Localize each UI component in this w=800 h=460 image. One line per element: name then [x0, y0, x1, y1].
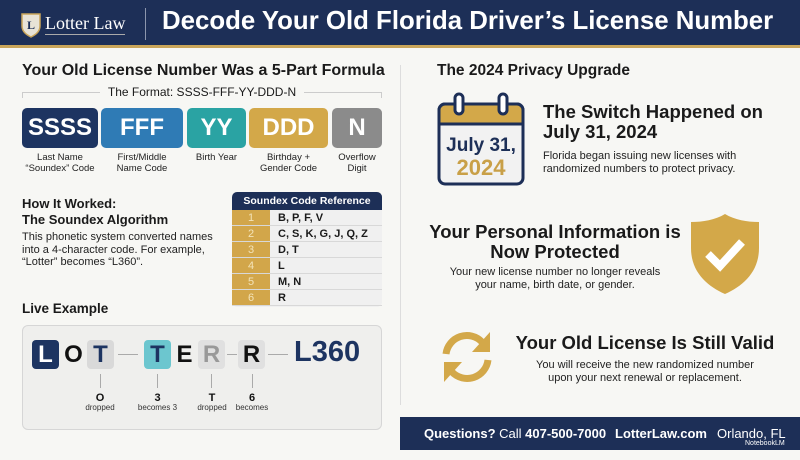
icon: shield logo [21, 13, 41, 38]
protected text: Now Protected [490, 241, 620, 262]
text: Birth Year [196, 152, 237, 163]
text: 4 [248, 260, 254, 272]
text: D, T [278, 244, 299, 256]
text: 6 [248, 292, 254, 304]
live example heading: Live Example [22, 301, 108, 316]
soundex table: Soundex Code Reference [243, 195, 371, 207]
format boxes [22, 108, 98, 148]
box labels [25, 152, 95, 174]
text: T [209, 392, 215, 404]
protected text: your name, birth date, or gender. [475, 279, 635, 291]
format line [22, 85, 382, 99]
text: 2 [248, 228, 254, 240]
soundex explanation: How It Worked: [22, 196, 116, 211]
title: Decode Your Old Florida Driver’s License Number [162, 7, 773, 35]
text: Gender Code [260, 163, 317, 174]
still valid text [516, 332, 774, 384]
icon: shield logo: L [27, 18, 35, 32]
box labels: Last Name [37, 152, 83, 163]
text: C, S, K, G, J, Q, Z [278, 228, 368, 240]
switch text: The Switch Happened on [543, 101, 763, 122]
format boxes: SSSS [28, 114, 92, 141]
protected text [429, 221, 681, 291]
box labels: “Soundex” Code [25, 163, 95, 174]
text: 1 [248, 212, 254, 224]
text: dropped [197, 403, 227, 412]
icon: calendar [438, 92, 524, 186]
text: becomes [236, 403, 268, 412]
text: becomes 3 [138, 403, 177, 412]
text: Birthday + [267, 152, 310, 163]
text: Digit [347, 163, 366, 174]
soundex explanation: The Soundex Algorithm [22, 212, 168, 227]
icon: calendar: July 31, [446, 135, 516, 156]
text: N [348, 114, 366, 141]
panel: formula [22, 62, 385, 99]
switch text: July 31, 2024 [543, 121, 657, 142]
footer bar [400, 417, 800, 450]
right heading: The 2024 Privacy Upgrade [437, 62, 630, 79]
icon: refresh arrows [442, 332, 492, 382]
still valid text: You will receive the new randomized number [536, 359, 754, 371]
footer bar: LotterLaw.com [615, 426, 707, 441]
text: T [93, 341, 108, 368]
text: DDD [262, 114, 314, 141]
text: M, N [278, 276, 301, 288]
header bar [0, 0, 800, 48]
protected text: Your new license number no longer reveals [450, 266, 660, 278]
text: O [96, 392, 104, 404]
logo [21, 13, 126, 38]
text: 3 [154, 392, 161, 404]
text: 5 [248, 276, 254, 288]
text: Name Code [117, 163, 167, 174]
footer bar: Orlando, FL [717, 426, 786, 441]
footer bar: NotebookLM [745, 440, 785, 447]
soundex explanation [22, 196, 213, 268]
icon: calendar: 2024 [457, 155, 506, 180]
still valid text: Your Old License Is Still Valid [516, 332, 774, 353]
format line: The Format: SSSS-FFF-YY-DDD-N [108, 85, 296, 99]
text: E [176, 341, 192, 368]
text: R [243, 341, 260, 368]
protected text: Your Personal Information is [429, 221, 681, 242]
text: T [150, 341, 165, 368]
text: R [203, 341, 220, 368]
text: Overflow [338, 152, 376, 163]
still valid text: upon your next renewal or replacement. [548, 372, 742, 384]
heading: Your Old License Number Was a 5-Part Formula [22, 62, 385, 79]
text: O [64, 341, 83, 368]
text: YY [200, 114, 232, 141]
text: L [38, 341, 53, 368]
live example panel [22, 325, 382, 430]
text: L [278, 260, 285, 272]
icon: shield check [691, 214, 759, 294]
text: dropped [85, 403, 115, 412]
result L360: L360 [294, 336, 360, 368]
text: First/Middle [117, 152, 167, 163]
text: R [278, 292, 286, 304]
soundex explanation: This phonetic system converted names into a 4-character code. For example, “Lotter” becomes “L360”. [22, 231, 213, 268]
logo: Lotter Law [45, 13, 125, 33]
switch text [543, 101, 763, 175]
text: B, P, F, V [278, 212, 323, 224]
text: 3 [248, 244, 254, 256]
footer bar: Questions? Call 407-500-7000 [424, 426, 606, 441]
switch text: Florida began issuing new licenses with randomized numbers to protect privacy. [543, 150, 736, 175]
text: 6 [249, 392, 255, 404]
text: FFF [120, 114, 164, 141]
soundex table [232, 192, 382, 307]
